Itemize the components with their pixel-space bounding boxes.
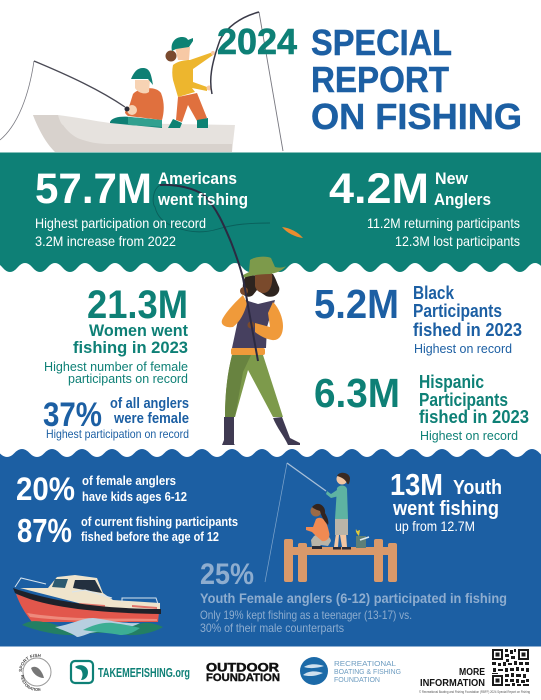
label: fished in 2023: fished in 2023 [413, 320, 522, 340]
heading: on fishing: ON FISHING [311, 96, 522, 137]
icon: bait bucket [356, 529, 369, 548]
icon: vest [232, 300, 275, 348]
text: highest participation: Highest participation on record [35, 215, 206, 231]
number: 5.2M: 5.2M [314, 281, 399, 327]
number: 57.7M: 57.7M [35, 165, 152, 213]
icon: orange waistband [231, 348, 265, 355]
icon: dock [284, 539, 397, 582]
icon: cabin window [73, 580, 102, 593]
icon: black rub rail [13, 588, 161, 614]
text: male counterparts: 30% of their male counterparts [200, 621, 344, 635]
logo: sport fish restoration [18, 654, 52, 691]
number: 20%: 20% [16, 471, 75, 507]
icon: fishing rod [287, 463, 326, 491]
logo: outdoor foundation: FOUNDATION [206, 672, 280, 684]
label: participants: Participants [413, 301, 502, 321]
icon: right fishing rod [211, 12, 259, 94]
label: americans: Americans [158, 170, 237, 188]
illustration: red motor boat [13, 575, 163, 637]
text: highest on record: Highest on record [420, 428, 518, 443]
panel: teal participation band [0, 152, 541, 272]
number: 4.2M: 4.2M [329, 165, 429, 213]
label: fishing in 2023: fishing in 2023 [73, 338, 188, 357]
stat: 25 percent youth female [200, 558, 507, 635]
heading: report: REPORT [311, 59, 449, 100]
icon: hands [240, 287, 254, 328]
illustration: two anglers in a boat [0, 12, 283, 152]
icon: green trousers [225, 355, 283, 417]
stat: youth went fishing [390, 467, 502, 534]
icon: waves [22, 619, 163, 635]
label: were female: were female [113, 411, 189, 427]
icon: deck [20, 575, 160, 611]
text: highest on record: Highest on record [414, 341, 512, 356]
stat: new anglers [329, 165, 520, 249]
number: 25%: 25% [200, 558, 254, 591]
icon: boy standing [326, 473, 351, 550]
icon: left fishing rod [34, 61, 125, 107]
label: youth: Youth [453, 477, 502, 499]
icon: right fishing line [259, 12, 283, 151]
logo: sport fish restoration: SPORT FISH [18, 654, 41, 672]
text: copyright line: © Recreational Boating and Fishing Foundation (RBFF) 2024 Special Report on Fishing [419, 690, 530, 694]
text: more information [420, 667, 485, 689]
text: up from: up from 12.7M [395, 518, 475, 534]
logo: sport fish restoration: RESTORATION [21, 674, 40, 691]
icon: fishing rod [160, 185, 258, 361]
icon: boat hull [33, 115, 235, 152]
icon: qr code [492, 649, 529, 686]
text: participants on record: participants on record [68, 371, 188, 386]
stat: americans went fishing [35, 165, 248, 249]
stat: women went fishing [44, 283, 188, 386]
label: went fishing: went fishing [392, 498, 499, 520]
icon: deck stripes [79, 603, 157, 609]
number: 21.3M: 21.3M [87, 283, 188, 327]
label: hispanic: Hispanic [419, 372, 484, 392]
text: more information: INFORMATION [420, 678, 485, 689]
label: of female anglers: of female anglers [82, 473, 176, 488]
logo: recreational boating and fishing foundation [300, 657, 401, 685]
icon: fishing line [265, 463, 287, 582]
heading: special: SPECIAL [311, 22, 452, 63]
icon: hull [16, 594, 159, 622]
stat: hispanic participants [314, 370, 529, 443]
icon: seated man [110, 68, 164, 128]
label: new: New [435, 170, 468, 188]
icon: fishing line [153, 185, 270, 232]
text: increase: 3.2M increase from 2022 [35, 233, 176, 249]
icon: lure [282, 227, 303, 238]
text: highest number: Highest number of female [44, 359, 188, 374]
icon: hull stripe [27, 613, 157, 621]
logo: take me fishing [71, 661, 190, 683]
icon: standing girl [166, 37, 215, 128]
logo: take me fishing: TAKEMEFISHING.org [98, 665, 190, 680]
icon: left fishing line [0, 61, 34, 140]
panel: blue youth band [0, 449, 541, 646]
label: youth female anglers: Youth Female anglers (6-12) participated in fishing [200, 590, 507, 606]
title [217, 21, 522, 137]
label: anglers: Anglers [434, 190, 491, 209]
stat: black participants [314, 281, 522, 356]
icon: railings [15, 578, 158, 604]
label: participants: Participants [419, 390, 508, 410]
icon: right sleeve [255, 302, 283, 340]
logo: recreational boating and fishing foundation: RECREATIONAL [334, 659, 396, 668]
stat: 20 percent have kids [16, 471, 187, 507]
label: went fishing: went fishing [157, 190, 248, 209]
icon: left sleeve [222, 295, 247, 327]
text: more information: MORE [459, 667, 485, 678]
icon: boots [222, 417, 300, 445]
logo: outdoor foundation [206, 662, 280, 684]
label: black: Black [413, 283, 455, 303]
icon: girl crouching [306, 504, 331, 549]
label: fished in 2023: fished in 2023 [419, 407, 529, 427]
illustration: kids on a dock [265, 463, 397, 582]
heading: year: 2024 [217, 21, 297, 62]
icon: hat [242, 257, 286, 278]
number: 37%: 37% [43, 396, 102, 434]
label: women went: Women went [89, 321, 188, 340]
number: 13M: 13M [390, 467, 443, 502]
text: lost participants: 12.3M lost participants [395, 233, 520, 249]
illustration: woman fishing [153, 185, 303, 445]
label: fished before 12: fished before the age of 12 [81, 530, 219, 544]
label: of current participants: of current fishing participants [81, 515, 238, 529]
text: only 19 percent: Only 19% kept fishing as a teenager (13-17) vs. [200, 608, 412, 622]
logo: outdoor foundation: OUTDOOR [206, 662, 280, 674]
stat: 37 percent female [43, 396, 189, 441]
stat: 87 percent fished before 12 [17, 512, 238, 549]
logo: recreational boating and fishing foundation: BOATING & FISHING [334, 667, 401, 676]
number: 87%: 87% [17, 512, 72, 549]
icon: front window [52, 579, 68, 588]
icon: trouser shadow [225, 355, 251, 417]
label: have kids: have kids ages 6-12 [82, 489, 187, 504]
text: returning participants: 11.2M returning participants [367, 215, 520, 231]
text: highest participation: Highest participation on record [46, 427, 189, 441]
logo: recreational boating and fishing foundation: FOUNDATION [334, 675, 380, 684]
number: 6.3M: 6.3M [314, 370, 400, 416]
icon: face and hair [242, 273, 279, 297]
label: of all anglers: of all anglers [110, 396, 189, 412]
